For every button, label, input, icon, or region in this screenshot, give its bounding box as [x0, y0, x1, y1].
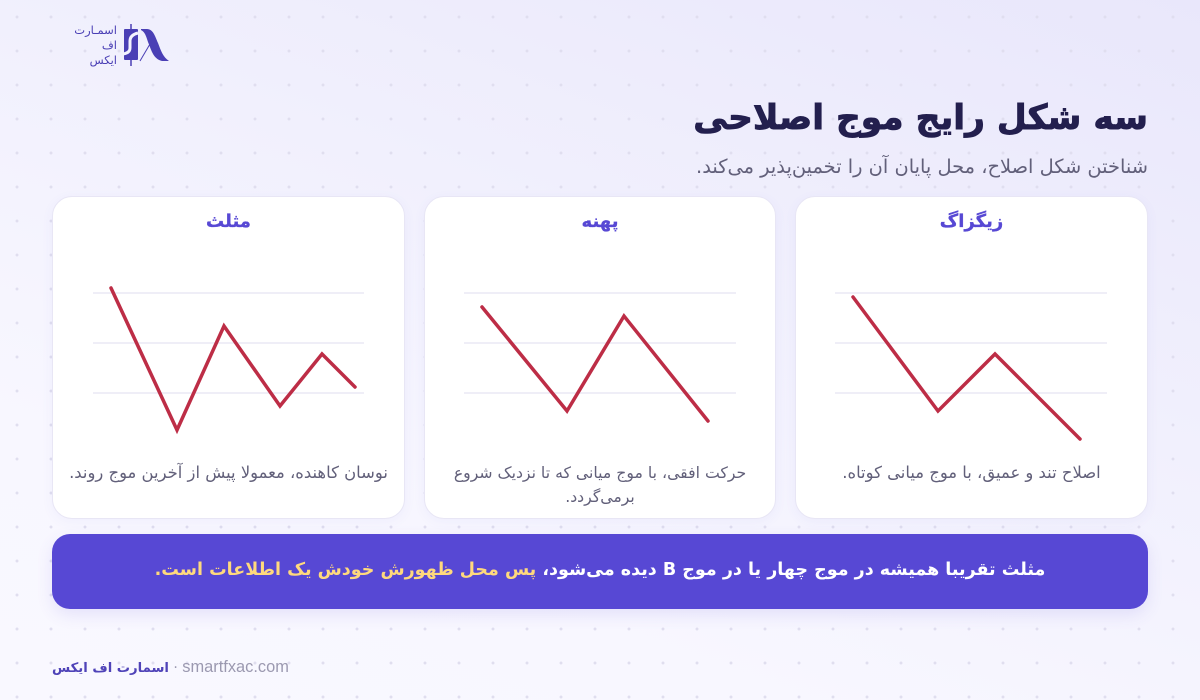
logo mark [124, 24, 169, 66]
description: zigzag: اصلاح تند و عمیق، با موج میانی کوتاه. [842, 463, 1101, 482]
logo text: ایکس [90, 53, 117, 67]
callout: مثلث تقریبا همیشه در موج چهار یا در موج B دیده می‌شود، پس محل ظهورش خودش یک اطلاعات است. [155, 560, 1045, 580]
footer: اسمارت اف ایکس · smartfxac.com [52, 658, 289, 676]
title: سه شکل رایج موج اصلاحی [693, 98, 1148, 138]
panel: flat [424, 196, 776, 519]
logo text [74, 23, 117, 67]
logo [74, 23, 169, 67]
subtitle: شناختن شکل اصلاح، محل پایان آن را تخمین‌پذیر می‌کند. [696, 155, 1148, 178]
panel: zigzag [795, 196, 1148, 519]
description: triangle: نوسان کاهنده، معمولا پیش از آخرین موج روند. [69, 463, 388, 482]
heading: zigzag: زیگزاگ [940, 211, 1003, 232]
heading: flat: پهنه [582, 211, 618, 232]
description: flat: حرکت افقی، با موج میانی که تا نزدیک شروع برمی‌گردد. [454, 463, 746, 506]
logo text: اف [102, 38, 117, 52]
chart: flat [464, 292, 736, 423]
chart: zigzag [835, 292, 1107, 441]
chart: triangle [93, 286, 364, 434]
heading: triangle: مثلث [206, 211, 251, 232]
callout [52, 534, 1148, 609]
panel: triangle [52, 196, 405, 519]
logo text: اسمـارت [74, 23, 117, 37]
